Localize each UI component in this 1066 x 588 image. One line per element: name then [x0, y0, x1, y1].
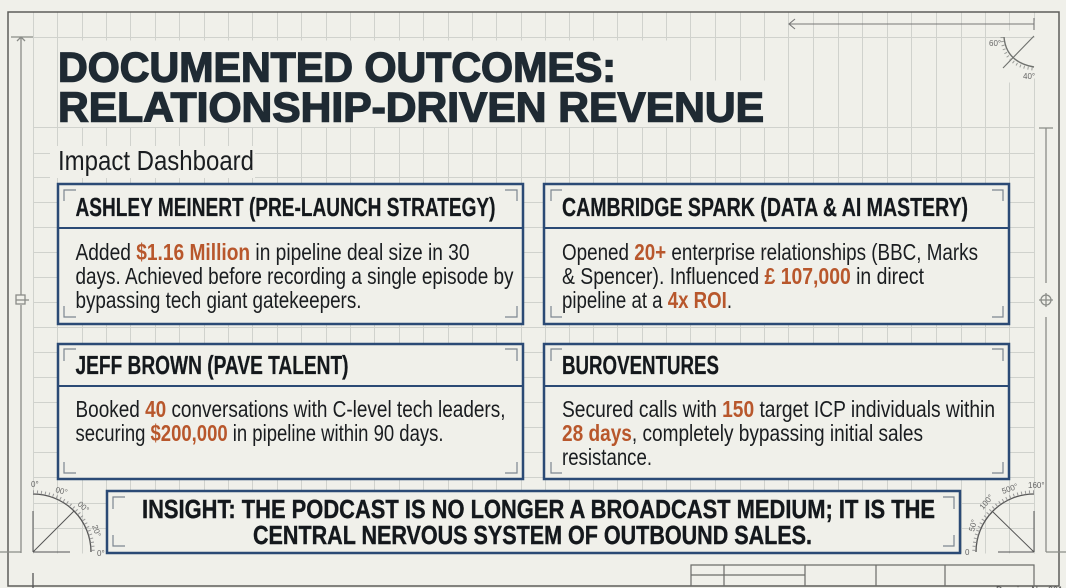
subtitle: Impact Dashboard — [58, 145, 254, 176]
icon: right protractor: 0 — [965, 548, 970, 557]
icon: right protractor: 500° — [1001, 482, 1019, 496]
panel: Cambridge Spark: & Spencer). Influenced £ 107,000 in direct — [562, 263, 925, 289]
panel: Buroventures: Secured calls with 150 target ICP individuals within — [562, 396, 995, 422]
icon: top right protractor: 40° — [1023, 72, 1035, 81]
title: RELATIONSHIP-DRIVEN REVENUE — [58, 84, 764, 130]
left ruler — [0, 37, 33, 588]
panel: Buroventures: BUROVENTURES — [562, 350, 719, 380]
panel: Jeff Brown: JEFF BROWN (PAVE TALENT) — [76, 350, 348, 380]
title — [58, 44, 764, 130]
title: DOCUMENTED OUTCOMES: — [58, 44, 616, 90]
panel: Ashley Meinert: Added $1.16 Million in pipeline deal size in 30 — [76, 239, 470, 265]
panel: Cambridge Spark: pipeline at a 4x ROI. — [562, 287, 732, 313]
panel: insight callout: INSIGHT: THE PODCAST IS NO LONGER A BROADCAST MEDIUM; IT IS THE — [142, 494, 935, 524]
top dimension arrow — [789, 18, 1034, 30]
icon: right protractor: 50° — [967, 518, 979, 533]
icon: top right protractor — [989, 36, 1035, 81]
title block — [691, 565, 1034, 586]
icon: left protractor: 0° — [97, 549, 105, 558]
icon: top right protractor: 60° — [989, 39, 1001, 48]
panel: Ashley Meinert: ASHLEY MEINERT (PRE-LAUNCH STRATEGY) — [76, 192, 496, 222]
panel: Buroventures — [544, 344, 1009, 479]
icon: left protractor: 20° — [90, 524, 103, 538]
icon: left protractor — [31, 480, 105, 558]
panel: Jeff Brown: securing $200,000 in pipeline within 90 days. — [76, 420, 444, 446]
icon: right protractor — [965, 481, 1045, 557]
panel: Jeff Brown — [58, 344, 523, 479]
panel: Buroventures: 28 days, completely bypassing initial sales — [562, 420, 923, 446]
panel: insight callout — [107, 491, 960, 553]
panel: Cambridge Spark: Opened 20+ enterprise relationships (BBC, Marks — [562, 239, 978, 265]
right ruler — [1039, 128, 1066, 552]
icon: right protractor: 160° — [1028, 481, 1045, 490]
panel: Ashley Meinert: days. Achieved before recording a single episode by — [76, 263, 514, 289]
panel: Ashley Meinert: bypassing tech giant gatekeepers. — [76, 287, 362, 313]
panel: Jeff Brown: Booked 40 conversations with C-level tech leaders, — [76, 396, 506, 422]
icon: left protractor: 00° — [54, 485, 69, 497]
panel: Ashley Meinert — [58, 184, 523, 324]
panel: insight callout: CENTRAL NERVOUS SYSTEM OF OUTBOUND SALES. — [253, 520, 812, 550]
panel: Cambridge Spark — [544, 184, 1009, 324]
icon: left protractor: 0° — [31, 480, 39, 489]
icon: left protractor: 00° — [76, 500, 91, 514]
panel: Buroventures: resistance. — [562, 444, 652, 470]
icon: right protractor: 100° — [978, 493, 995, 511]
